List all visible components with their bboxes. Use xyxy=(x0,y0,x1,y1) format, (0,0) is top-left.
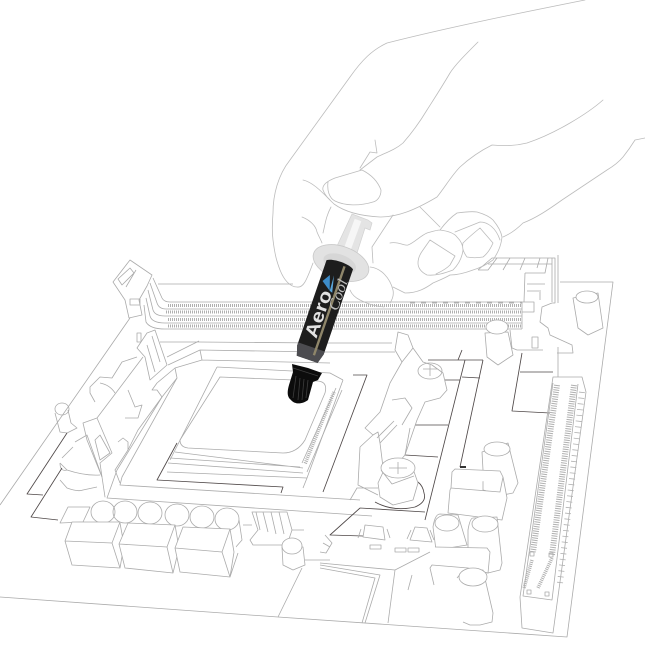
syringe body xyxy=(293,257,357,365)
lower bracket xyxy=(83,418,112,497)
thumb and nail xyxy=(323,100,603,217)
brand text Aero: Aero xyxy=(300,287,336,340)
brand text Cool: Cool xyxy=(326,277,352,313)
motherboard outline xyxy=(0,282,613,637)
gold stripe xyxy=(314,266,345,355)
syringe flange xyxy=(308,238,374,288)
dark chipset rectangle xyxy=(512,353,553,413)
hand outline xyxy=(272,0,645,307)
syringe cap xyxy=(288,364,322,403)
hand back xyxy=(272,0,585,287)
left retention bracket xyxy=(60,330,177,497)
standoff post near RAM xyxy=(485,320,513,365)
left fingers xyxy=(302,180,384,307)
lower tab xyxy=(152,368,177,397)
PCIe slot xyxy=(520,377,586,633)
syringe plunger xyxy=(337,214,372,253)
palm xyxy=(370,215,450,303)
dark trace lines left xyxy=(27,433,67,520)
CPU chip xyxy=(180,377,326,453)
index and middle fingers xyxy=(390,207,502,275)
socket tiers xyxy=(157,375,367,493)
standoff post left xyxy=(55,403,77,433)
small capacitor xyxy=(282,538,305,570)
tube xyxy=(294,257,354,364)
inductors xyxy=(65,522,238,577)
fan header xyxy=(243,512,304,545)
CPU socket frame xyxy=(107,341,395,516)
upper tab xyxy=(137,330,167,380)
chips xyxy=(320,525,434,553)
thermal paste syringe xyxy=(288,214,374,403)
RAM latch left xyxy=(113,260,152,342)
RAM latch right xyxy=(478,255,573,377)
right retention bracket xyxy=(350,332,447,505)
lower board traces xyxy=(330,350,483,536)
strap xyxy=(90,357,162,483)
rear IO block xyxy=(278,552,430,623)
capacitor row xyxy=(60,501,242,548)
lower hand edge xyxy=(503,138,645,237)
right capacitors and inductors xyxy=(430,442,518,625)
motherboard illustration xyxy=(0,255,613,637)
RAM slots xyxy=(144,278,522,329)
standoff post top right xyxy=(573,291,603,335)
thumb line xyxy=(360,42,478,170)
logo: blue triangles xyxy=(320,272,338,293)
